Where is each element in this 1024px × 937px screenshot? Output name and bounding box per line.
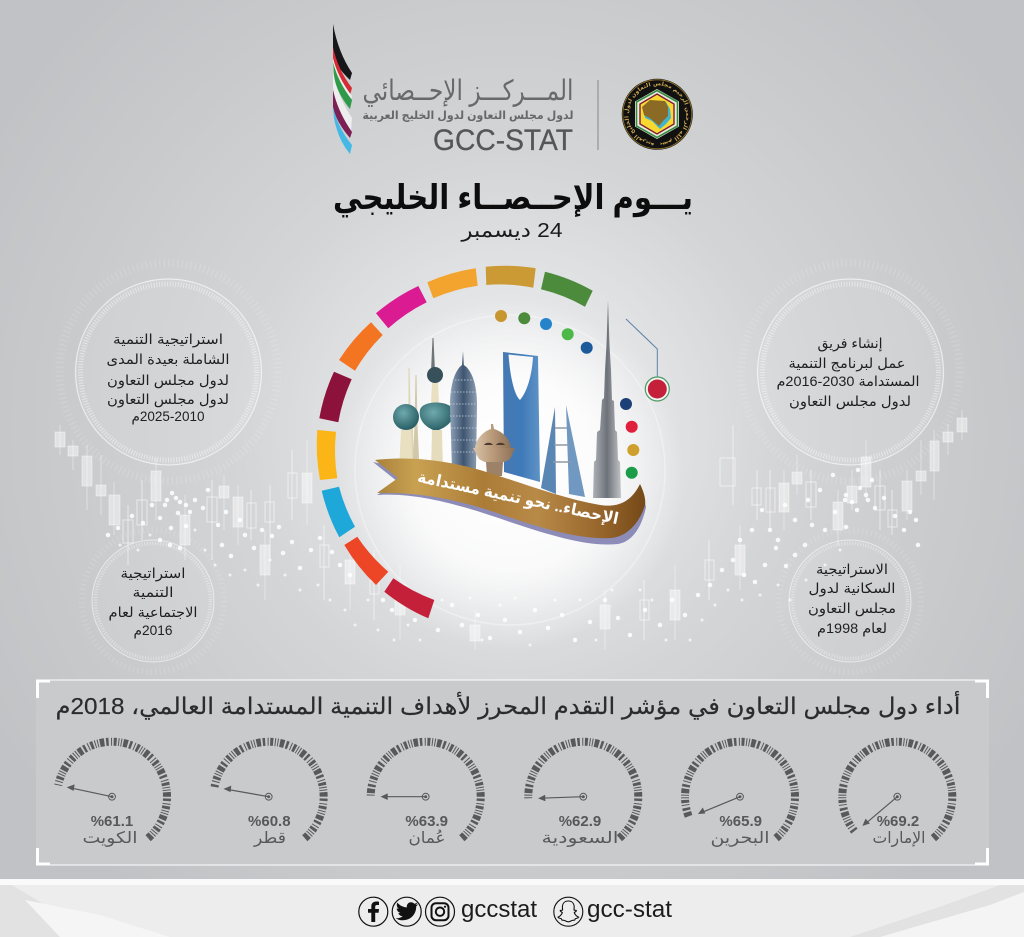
gauge: UAE: الإمارات [872, 830, 926, 848]
social icons: Snapchat [554, 897, 583, 926]
small coloured dots [495, 310, 639, 479]
panel heading: أداء دول مجلس التعاون في مؤشر التقدم المحرز لأهداف التنمية المستدامة العالمي، 2018م [56, 691, 961, 720]
circle: social development strategy: 2016م [134, 622, 173, 638]
logo: Arabic name: المـــركـــز الإحــصائي [362, 75, 574, 107]
footer handle: gccstat: gccstat [461, 896, 537, 923]
circle: sustainable development team [742, 263, 960, 481]
logo: Arabic subtitle: لدول مجلس التعاون لدول الخليج العربية [362, 110, 574, 123]
circle: social development strategy: التنمية [132, 584, 174, 600]
gauge: Qatar: قطر [253, 830, 286, 848]
circle: social development strategy [82, 530, 224, 672]
SDG coloured ring segments [317, 266, 593, 618]
gauge: Oman: %63.9 [405, 813, 448, 830]
GCC emblem seal: بسم الله الرحمن الرحيم مجلس التعاون لدول الخليج العربية [624, 82, 689, 146]
gauge: Bahrain: %65.9 [719, 813, 762, 830]
circle: social development strategy: استراتيجية [120, 565, 186, 582]
gauge: Kuwait [58, 742, 167, 848]
gauge: UAE: %69.2 [877, 813, 919, 830]
social icons: Twitter [392, 897, 421, 926]
logo: GCC-STAT wordmark: GCC-STAT [433, 124, 573, 157]
circle: population strategy [779, 530, 921, 672]
gauge: Kuwait: %61.1 [91, 813, 133, 830]
circle: population strategy: لعام 1998م [817, 620, 887, 636]
gauge: Qatar [215, 742, 324, 848]
circle: long-term strategy: 2025-2010م [132, 408, 205, 424]
Burj Khalifa [593, 300, 621, 498]
footer band [0, 879, 1024, 937]
date subtitle: 24 ديسمبر [460, 220, 562, 242]
circle: long-term strategy: لدول مجلس التعاون [107, 391, 229, 408]
gauge: Kuwait: الكويت [82, 830, 138, 848]
central white glow [335, 300, 685, 650]
gauge: Oman: عُمان [408, 829, 446, 847]
circle: sustainable development team: إنشاء فريق [818, 335, 883, 352]
gauge: Saudi Arabia: %62.9 [559, 813, 601, 830]
main title: يـــوم الإحــصــاء الخليجي [333, 179, 693, 218]
GCC skyline illustration [393, 300, 621, 498]
gold ribbon banner [373, 458, 646, 545]
gauge: Bahrain: البحرين [710, 830, 770, 848]
candlestick chart backdrop [55, 410, 967, 650]
circle: sustainable development team: لدول مجلس التعاون [789, 393, 911, 410]
domed minaret [473, 424, 515, 476]
circle: social development strategy: الاجتماعية لعام [108, 604, 198, 620]
ribbon slogan: الإحصاء.. نحو تنمية مستدامة [416, 469, 620, 528]
circle: sustainable development team: المستدامة 2030-2016م [776, 373, 920, 389]
circle: long-term strategy: استراتيجية التنمية [113, 331, 223, 348]
gauge: Saudi Arabia [528, 742, 638, 848]
circle: population strategy: السكانية لدول [808, 580, 896, 597]
Kuwait towers [393, 338, 454, 473]
social icons: Facebook [359, 897, 388, 926]
gauge: Bahrain [685, 742, 795, 848]
logo: flag ribbon [333, 24, 352, 154]
circle: long-term strategy: الشاملة بعيدة المدى [106, 351, 230, 367]
Doha tower [450, 351, 477, 470]
circle: sustainable development team: عمل لبرنامج التنمية [788, 355, 906, 372]
gauge: Qatar: %60.8 [248, 813, 291, 830]
social icons: Instagram [426, 897, 454, 926]
circle: long-term strategy: لدول مجلس التعاون [107, 372, 229, 389]
red target marker with leader line [626, 319, 669, 401]
Bahrain World Trade Center [541, 405, 585, 497]
circle: long-term strategy [60, 263, 278, 481]
gauge: UAE [842, 742, 952, 848]
header: GCC-STAT logo [333, 24, 574, 157]
circle: population strategy: الاستراتيجية [816, 561, 888, 578]
gauge: Saudi Arabia: السعودية [542, 830, 618, 848]
panel: GCC performance gauges [36, 680, 989, 865]
footer handle: gcc-stat: gcc-stat [587, 896, 672, 923]
faint inner ring [355, 315, 665, 625]
gauge: Oman [371, 742, 481, 847]
particle field [108, 470, 918, 645]
circle: population strategy: مجلس التعاون [808, 600, 896, 617]
Kingdom Centre [503, 352, 540, 482]
logo divider [598, 80, 599, 150]
